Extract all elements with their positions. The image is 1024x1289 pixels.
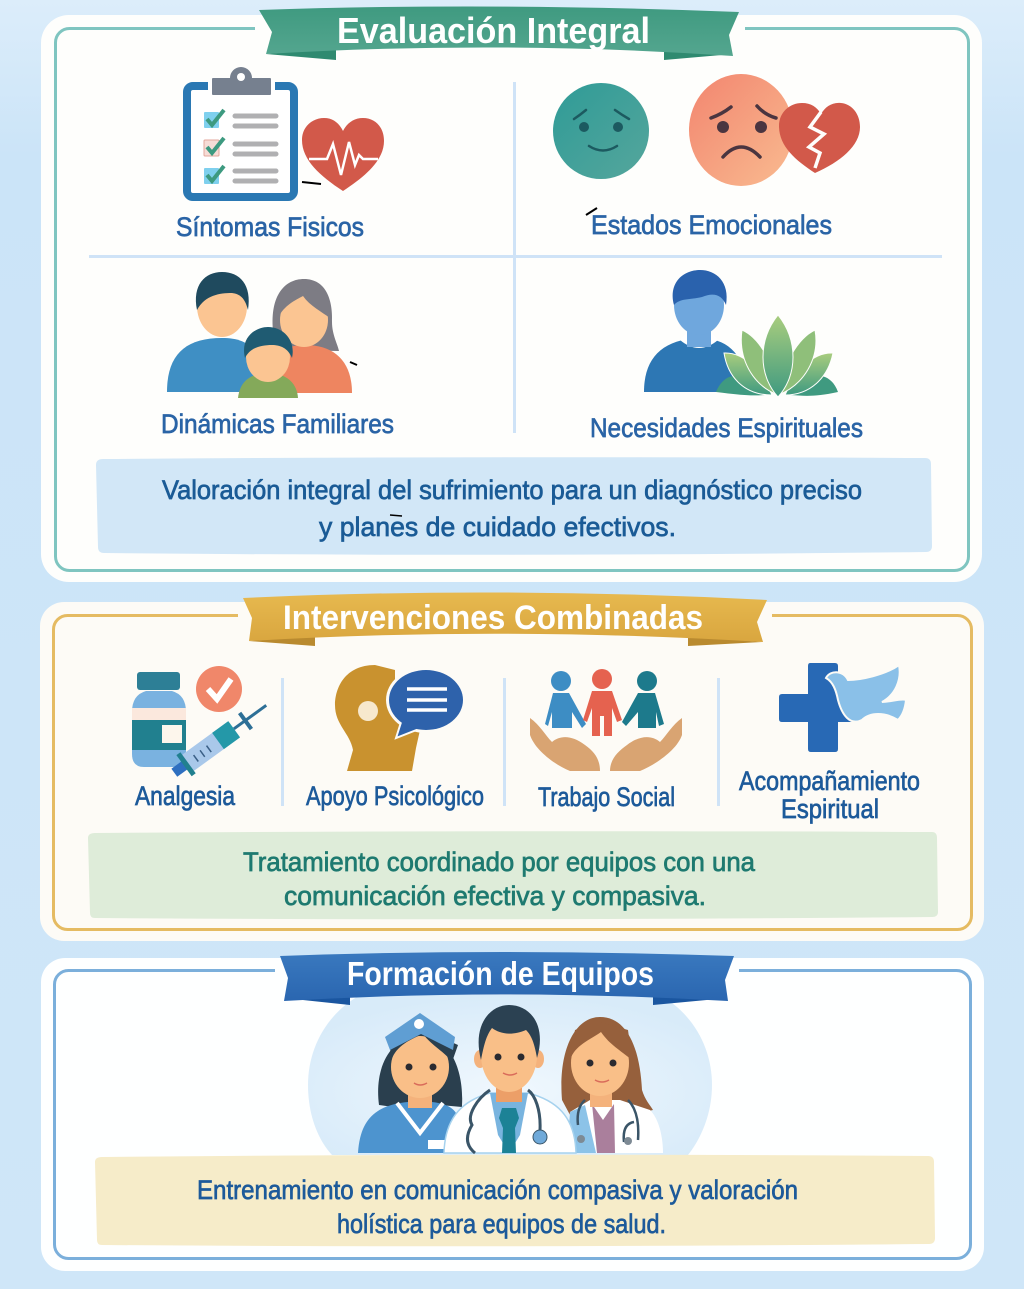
label: Acompañamiento Espiritual: Acompañamiento	[739, 766, 920, 796]
label: Síntomas Fisicos: Síntomas Fisicos	[176, 212, 364, 242]
icon: cross and dove	[779, 663, 906, 752]
icon: person with lotus	[644, 270, 838, 397]
heading ribbon: Evaluación Integral: Evaluación Integral	[337, 10, 650, 51]
icon: clipboard with checklist	[187, 67, 294, 197]
heading ribbon: Intervenciones Combinadas: Intervenciones Combinadas	[283, 599, 703, 637]
illustration: care team	[358, 1005, 663, 1153]
label: Acompañamiento Espiritual	[739, 766, 920, 824]
callout: tratamiento coordinado: Tratamiento coordinado por equipos con una	[243, 847, 756, 877]
icon: teal worried face	[553, 83, 649, 179]
label: Trabajo Social: Trabajo Social	[538, 782, 675, 812]
icon: sad orange face	[689, 74, 793, 186]
label: Analgesia: Analgesia	[135, 781, 236, 811]
label: Acompañamiento Espiritual: Espiritual	[781, 794, 879, 824]
panel: Intervenciones Combinadas	[40, 592, 984, 941]
callout: entrenamiento	[95, 1155, 935, 1246]
mark: stray stroke	[586, 208, 597, 215]
callout: valoración integral: y planes de cuidado efectivos.	[319, 512, 676, 542]
heading ribbon: Evaluación Integral	[255, 6, 745, 60]
panel: Evaluación Integral	[41, 6, 982, 582]
label: Dinámicas Familiares: Dinámicas Familiares	[161, 409, 394, 439]
label: Necesidades Espirituales: Necesidades Espirituales	[590, 413, 863, 443]
callout: tratamiento coordinado	[88, 831, 938, 919]
nurse	[358, 1013, 462, 1153]
illustration background	[308, 995, 712, 1155]
panel: Formación de Equipos	[41, 952, 984, 1271]
heading ribbon: Formación de Equipos: Formación de Equipos	[347, 955, 654, 992]
icon: medicine bottle and syringe	[132, 666, 274, 783]
heading ribbon: Intervenciones Combinadas	[238, 592, 772, 646]
callout: entrenamiento: holística para equipos de salud.	[337, 1209, 666, 1239]
label: Apoyo Psicológico: Apoyo Psicológico	[306, 781, 484, 811]
callout: entrenamiento: Entrenamiento en comunicación compasiva y valoración	[197, 1175, 798, 1205]
icon: heart with pulse	[302, 118, 384, 191]
icon: broken heart	[779, 103, 860, 173]
icon: family	[167, 272, 352, 398]
woman doctor	[561, 1017, 663, 1153]
label: Estados Emocionales: Estados Emocionales	[591, 210, 832, 240]
heading ribbon: Formación de Equipos	[275, 952, 739, 1005]
callout: tratamiento coordinado: comunicación efectiva y compasiva.	[284, 881, 706, 911]
icon: head with speech bubble	[335, 665, 466, 771]
callout: valoración integral: Valoración integral del sufrimiento para un diagnóstico preciso	[162, 475, 862, 505]
icon: people held in hands	[530, 669, 682, 771]
male doctor	[444, 1005, 576, 1153]
mark: stray stroke	[302, 182, 321, 184]
mark: stray stroke	[350, 362, 357, 365]
callout: valoración integral	[96, 457, 932, 555]
